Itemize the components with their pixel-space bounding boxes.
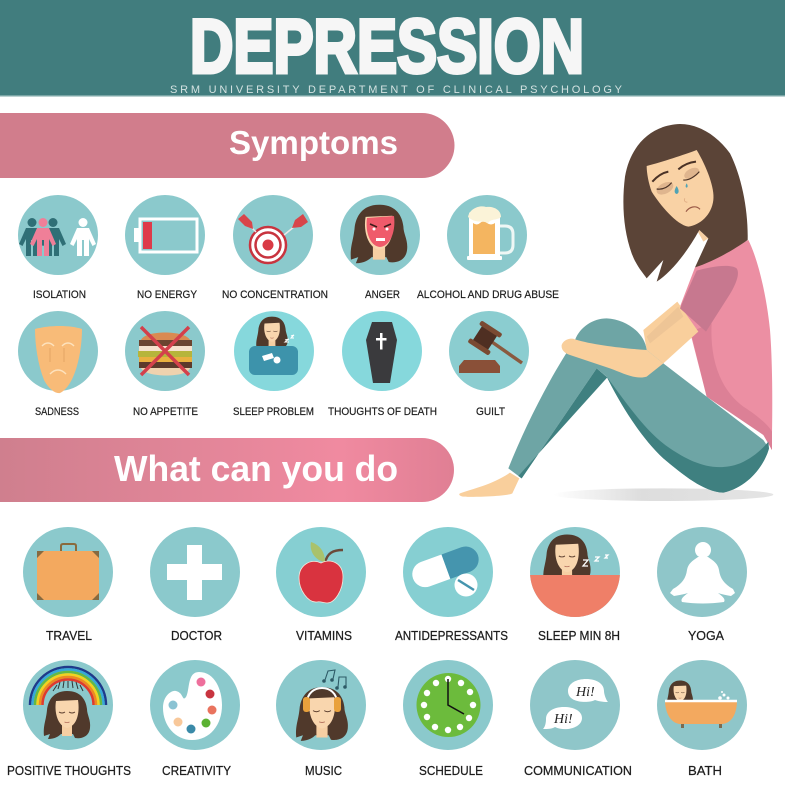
action: creativity (150, 660, 240, 778)
label: YOGA (688, 628, 724, 643)
subtitle: SRM UNIVERSITY DEPARTMENT OF CLINICAL PSYCHOLOGY (170, 84, 623, 96)
label: MUSIC (305, 763, 342, 778)
action: positive thoughts (7, 660, 131, 778)
action: schedule (403, 660, 493, 778)
icon: group and lone person (19, 218, 96, 256)
label: ANTIDEPRESSANTS (395, 628, 508, 643)
label: THOUGHTS OF DEATH (328, 406, 437, 418)
icon: apple (299, 542, 343, 603)
symptom: sleep problem (233, 311, 314, 418)
label: SLEEP MIN 8H (538, 628, 620, 643)
label: BATH (688, 763, 722, 778)
label: ISOLATION (33, 289, 86, 301)
label: CREATIVITY (162, 763, 231, 778)
heading: symptoms: Symptoms (229, 124, 398, 161)
icon: paint palette (163, 672, 222, 740)
action: travel (23, 527, 113, 643)
symptom: no appetite (125, 311, 205, 418)
icon: gavel (459, 320, 522, 373)
icon: woman in bathtub (665, 681, 737, 728)
heading: what can you do: What can you do (114, 448, 398, 489)
icon: crossed burger (138, 327, 192, 376)
label: SADNESS (35, 406, 79, 418)
icon: capsule and tablet (409, 543, 482, 596)
icon: meditating figure (670, 542, 735, 604)
icon: target with arrows (238, 214, 308, 264)
icon: coffin (366, 322, 397, 383)
illustration: sad woman sitting (459, 124, 773, 501)
action: music (276, 660, 366, 778)
action: communication (524, 660, 632, 778)
header banner (0, 0, 785, 96)
symptom: sadness (18, 311, 98, 418)
symptom: no energy (125, 195, 205, 301)
label: NO ENERGY (137, 289, 198, 301)
icon: suitcase (37, 544, 99, 600)
icon: speech bubbles: Hi! (553, 712, 573, 727)
symptom: thoughts of death (328, 311, 437, 418)
label: SCHEDULE (419, 763, 483, 778)
panel: what can you do (7, 527, 747, 778)
icon: angry woman (351, 205, 407, 263)
icon: clock (416, 673, 480, 737)
panel: symptoms (18, 195, 559, 418)
symptom: guilt (449, 311, 529, 418)
label: COMMUNICATION (524, 763, 632, 778)
icon: battery (134, 219, 197, 252)
symptom: alcohol and drug abuse (417, 195, 559, 301)
icon: medical cross (167, 545, 222, 600)
action: antidepressants (395, 527, 508, 643)
label: DOCTOR (171, 628, 222, 643)
label: GUILT (476, 406, 505, 418)
label: TRAVEL (46, 628, 92, 643)
icon: sleeping woman (530, 535, 620, 617)
action: doctor (150, 527, 240, 643)
icon: rainbow over woman (30, 667, 106, 739)
label: ANGER (365, 289, 400, 301)
heading: what can you do (0, 438, 454, 502)
icon: speech bubbles (543, 679, 608, 729)
icon: sad mask (35, 326, 82, 393)
action: sleep min 8h (530, 527, 620, 643)
label: NO APPETITE (133, 406, 198, 418)
title: DEPRESSION (190, 4, 584, 90)
action: vitamins (276, 527, 366, 643)
symptom: isolation (18, 195, 98, 301)
symptom: anger (340, 195, 420, 301)
icon: sleeping woman with pills (249, 317, 298, 375)
heading: symptoms (0, 113, 454, 178)
label: SLEEP PROBLEM (233, 406, 314, 418)
icon: speech bubbles: Hi! (575, 685, 595, 700)
label: POSITIVE THOUGHTS (7, 763, 131, 778)
label: VITAMINS (296, 628, 352, 643)
symptom: no concentration (222, 195, 328, 301)
icon: woman with headphones (296, 670, 348, 741)
icon: beer mug (467, 206, 513, 260)
label: NO CONCENTRATION (222, 289, 328, 301)
action: yoga (657, 527, 747, 643)
label: ALCOHOL AND DRUG ABUSE (417, 289, 559, 301)
action: bath (657, 660, 747, 778)
